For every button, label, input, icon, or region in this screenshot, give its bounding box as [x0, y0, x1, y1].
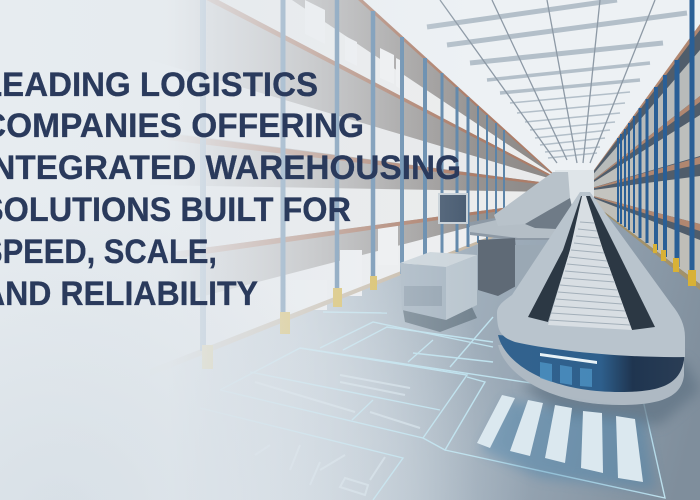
floor marking glow: [480, 400, 655, 490]
floor panel labels: [255, 375, 420, 495]
title: [0, 66, 461, 313]
floor shadow under belt: [520, 360, 700, 425]
rim: [497, 192, 685, 357]
beams: [578, 24, 700, 290]
yellow post feet: [653, 244, 696, 286]
beams: [150, 0, 555, 376]
left rack: [150, 0, 555, 376]
dark blue body band: [498, 335, 685, 392]
yellow post feet: [202, 276, 377, 369]
lower body ring: [498, 345, 684, 405]
sorting machinery: [438, 172, 578, 296]
side rail: [520, 243, 562, 296]
robot unit: [400, 252, 477, 332]
right rail: [584, 196, 655, 330]
left rail: [528, 196, 584, 322]
far floor patch: [515, 245, 552, 290]
stacked boxes: [287, 0, 402, 310]
light bar: [540, 353, 597, 364]
floor grid lines: [200, 312, 665, 500]
blue glow: [540, 362, 592, 387]
pale platforms: [470, 205, 578, 240]
inclined conveyor: [494, 172, 570, 226]
rollers: [548, 196, 632, 330]
ceiling: [361, 0, 700, 192]
back wall: [555, 170, 594, 215]
white floor stripes: [477, 395, 643, 482]
conveyor belt: [497, 192, 685, 405]
dark legs: [478, 238, 518, 296]
posts: [618, 0, 692, 280]
right rack: [578, 0, 700, 290]
posts: [203, 0, 504, 351]
control screen: [438, 193, 468, 224]
